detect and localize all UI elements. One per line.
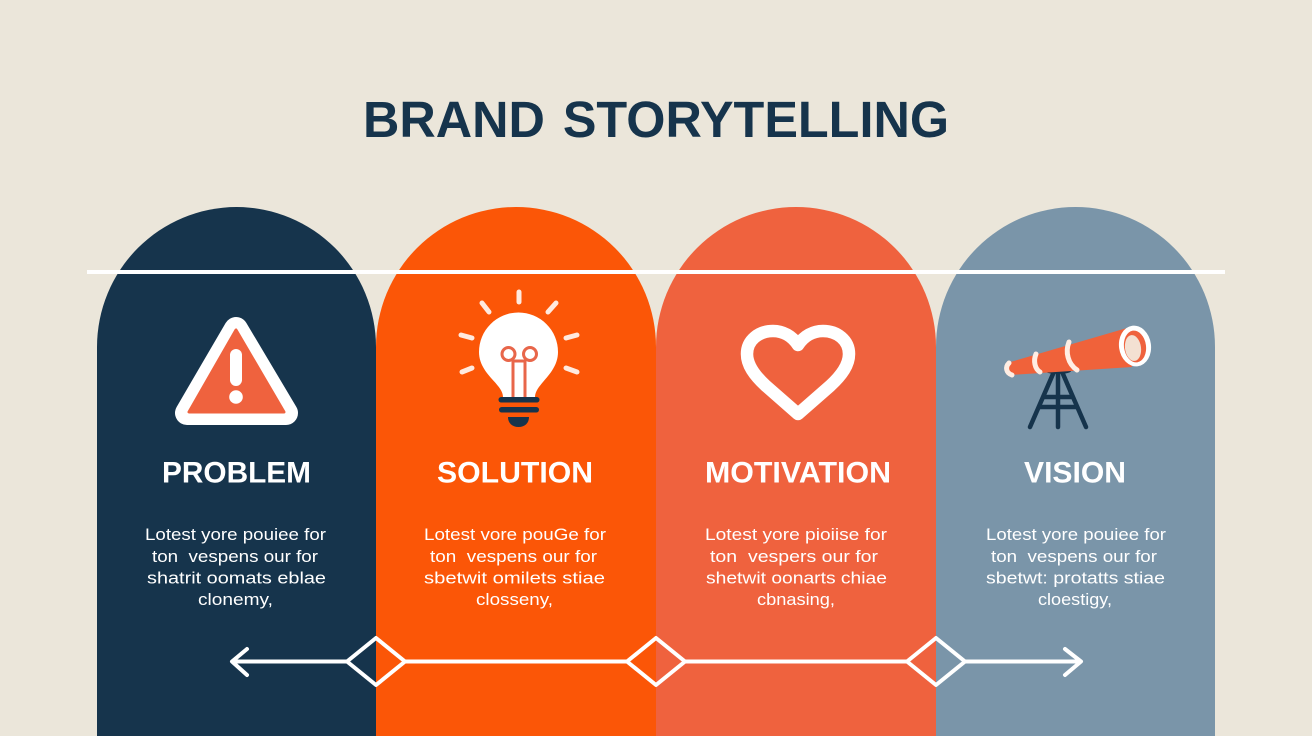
panel: solution <box>376 207 656 736</box>
text block: solution: sbetwit omilets stiae <box>424 570 605 588</box>
icon: heart <box>747 331 849 414</box>
text block: problem <box>145 526 327 609</box>
text block: vision: sbetwt: protatts stiae <box>986 570 1165 588</box>
text block: problem: shatrit oomats eblae <box>147 570 326 588</box>
text block: solution <box>424 526 607 609</box>
text block: motivation: ton vespers our for <box>710 548 879 566</box>
panel: vision <box>936 207 1215 736</box>
text block: vision: Lotest yore pouiee for <box>986 526 1167 544</box>
diamond: motivation to vision <box>907 638 965 685</box>
icon: warning triangle <box>187 329 286 413</box>
text block: problem: clonemy, <box>198 591 273 609</box>
heading: solution: SOLUTION <box>437 456 593 490</box>
text block: solution: closseny, <box>476 591 553 609</box>
heading: vision: VISION <box>1024 456 1126 490</box>
text block: vision <box>986 526 1167 609</box>
text block: solution: Lotest vore pouGe for <box>424 526 607 544</box>
timeline arrow with diamonds <box>232 638 1081 685</box>
text block: problem: Lotest yore pouiee for <box>145 526 327 544</box>
horizontal rule across arches <box>87 270 1225 274</box>
title: BRAND STORYTELLING <box>363 91 949 148</box>
icon: telescope <box>1007 323 1154 427</box>
text block: motivation <box>705 526 888 609</box>
text block: vision: cloestigy, <box>1038 591 1112 609</box>
text block: solution: ton vespens our for <box>430 548 598 566</box>
text block: problem: ton vespens our for <box>152 548 319 566</box>
heading: problem: PROBLEM <box>162 456 311 490</box>
panel: motivation <box>656 207 936 736</box>
heading: motivation: MOTIVATION <box>705 456 891 490</box>
text block: motivation: Lotest yore pioiise for <box>705 526 888 544</box>
text block: vision: ton vespens our for <box>991 548 1158 566</box>
text block: motivation: shetwit oonarts chiae <box>706 570 887 588</box>
icon: light bulb <box>461 292 577 427</box>
arrow: right head <box>1065 649 1081 675</box>
panel: problem <box>97 207 376 736</box>
text block: motivation: cbnasing, <box>757 591 835 609</box>
diamond: solution to motivation <box>627 638 685 685</box>
diamond: problem to solution <box>347 638 405 685</box>
arrow: left head <box>232 649 247 675</box>
